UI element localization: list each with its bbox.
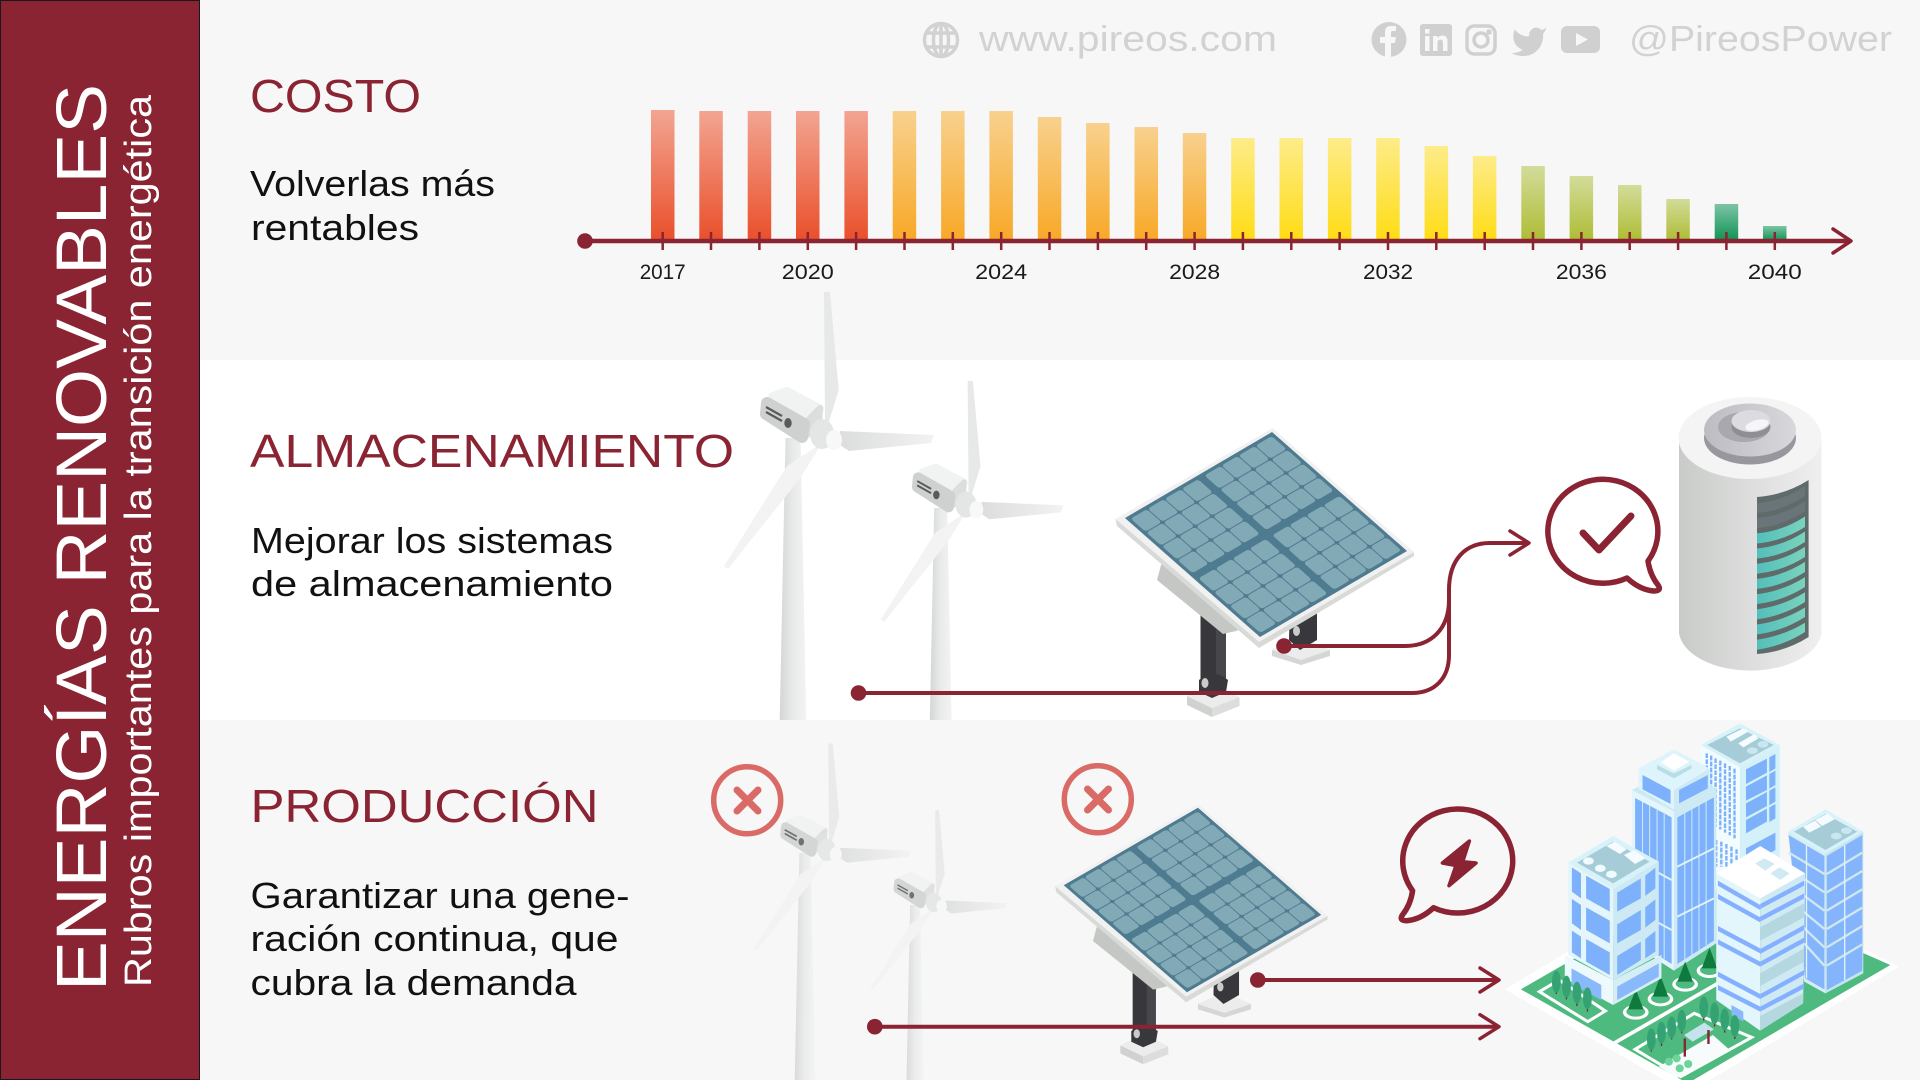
text: almacenamiento description [251, 520, 613, 604]
text: produccion description: cubra la demanda [250, 962, 578, 1003]
panel: produccion [200, 720, 1920, 1080]
building rear tower [1701, 723, 1780, 877]
garden trees [1552, 971, 1739, 1072]
website link [924, 18, 1277, 59]
illustration: wind turbine small [881, 381, 1063, 720]
pine trees [1623, 948, 1722, 1020]
icon: speech bubble with check [1548, 479, 1659, 591]
arrows: energy to city [867, 968, 1499, 1039]
icon: twitter [1512, 28, 1546, 56]
text: produccion description [250, 875, 630, 1003]
icon: linkedin [1420, 24, 1452, 56]
text: costo description [250, 163, 495, 248]
website text: www.pireos.com [978, 18, 1277, 59]
subtitle: Rubros importantes para la transición energética [118, 94, 160, 987]
bars [651, 110, 1786, 241]
icon: x mark over solar panel [1064, 766, 1131, 833]
illustration: solar panel [1116, 428, 1414, 717]
building front white [1716, 846, 1805, 1031]
illustration: solar panel [1055, 804, 1328, 1064]
year labels: 2020 [782, 261, 834, 284]
icon: speech bubble with lightning bolt [1401, 809, 1513, 921]
text: produccion description: ración continua, que [250, 918, 618, 959]
year labels: 2017 [640, 261, 686, 284]
panel: costo [200, 0, 1920, 360]
icon: x mark over turbine [714, 767, 781, 834]
heading: costo: COSTO [250, 70, 421, 122]
text: almacenamiento description: de almacenamiento [251, 563, 613, 604]
icon: globe [924, 23, 958, 57]
icon: youtube [1561, 26, 1600, 53]
text: produccion description: Garantizar una gene- [250, 875, 630, 916]
year labels: 2036 [1556, 261, 1607, 284]
text: almacenamiento description: Mejorar los sistemas [251, 520, 613, 561]
bar chart: costo timeline [577, 110, 1851, 284]
year labels: 2028 [1169, 261, 1220, 284]
building right rear [1788, 809, 1863, 993]
year labels: 2032 [1363, 261, 1413, 284]
ground [1505, 870, 1899, 1080]
year labels [640, 261, 1802, 284]
heading: almacenamiento: ALMACENAMIENTO [250, 425, 734, 477]
arrow: energy to storage [851, 531, 1529, 701]
title: ENERGÍAS RENOVABLES [43, 84, 122, 991]
building central tower [1632, 749, 1716, 971]
timeline axis [577, 229, 1851, 253]
building left [1565, 836, 1661, 1005]
year labels: 2024 [975, 261, 1028, 284]
icon: facebook [1372, 22, 1406, 57]
illustration: wind turbine large [724, 292, 934, 720]
illustration: battery [1678, 397, 1822, 671]
panel: almacenamiento [200, 292, 1920, 720]
heading: produccion: PRODUCCIÓN [250, 780, 598, 832]
text: costo description: rentables [251, 207, 419, 248]
social links [1372, 18, 1892, 59]
panel: sidebar [0, 0, 200, 1080]
icon: instagram [1467, 26, 1495, 54]
illustration: isometric city [1505, 723, 1899, 1080]
social handle: @PireosPower [1629, 18, 1892, 59]
illustration: wind turbine small faded [870, 810, 1007, 1080]
illustration: wind turbine large faded [753, 744, 911, 1080]
year labels: 2040 [1748, 261, 1802, 284]
text: costo description: Volverlas más [250, 163, 495, 204]
